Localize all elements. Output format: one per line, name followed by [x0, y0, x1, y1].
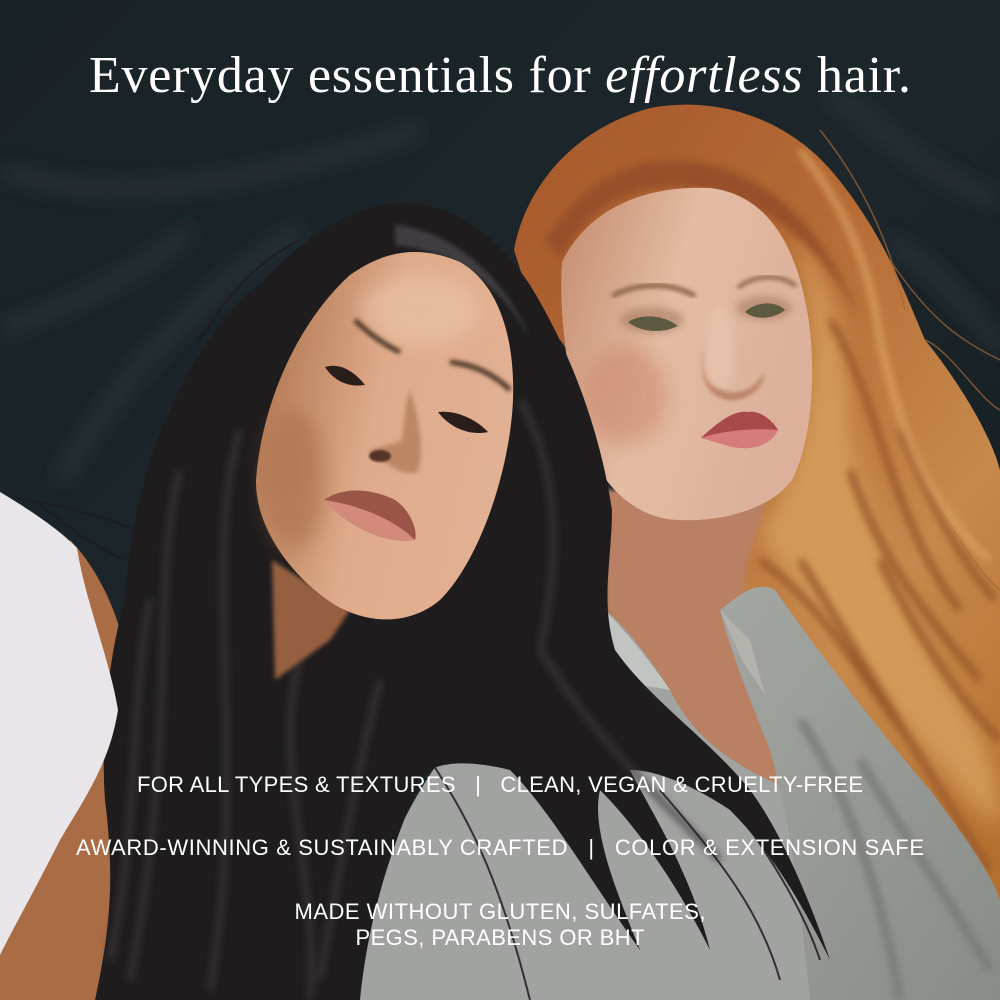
left figure: bare arm — [0, 540, 125, 1000]
red-haired woman: face — [561, 188, 812, 520]
claims line 3: MADE WITHOUT GLUTEN, SULFATES, — [294, 899, 706, 924]
title: Everyday essentials for effortless hair. — [89, 47, 911, 104]
eyebrow and eye, right — [450, 362, 510, 390]
claims line 1: FOR ALL TYPES & TEXTURES | CLEAN, VEGAN & CRUELTY-FREE — [137, 772, 863, 797]
dark-haired woman: hair — [15, 203, 830, 1000]
lips — [324, 491, 416, 541]
claims line 4: PEGS, PARABENS OR BHT — [356, 925, 644, 950]
eyebrow and eye, right — [738, 277, 796, 288]
claims line 2: AWARD-WINNING & SUSTAINABLY CRAFTED | COLOR & EXTENSION SAFE — [76, 835, 924, 860]
left figure: white sleeve — [0, 492, 118, 955]
eyebrow and eye, left — [355, 320, 400, 352]
nose — [368, 390, 421, 473]
nose — [702, 340, 764, 400]
eyebrow and eye, left — [612, 286, 695, 296]
grey jacket: collar and scarf — [340, 587, 1000, 1000]
red-haired woman: neck — [605, 490, 790, 800]
dark-haired woman: neck — [272, 560, 350, 680]
lips — [701, 412, 778, 448]
red-haired woman: hair — [514, 105, 1000, 905]
dark-haired woman: face — [256, 252, 513, 619]
